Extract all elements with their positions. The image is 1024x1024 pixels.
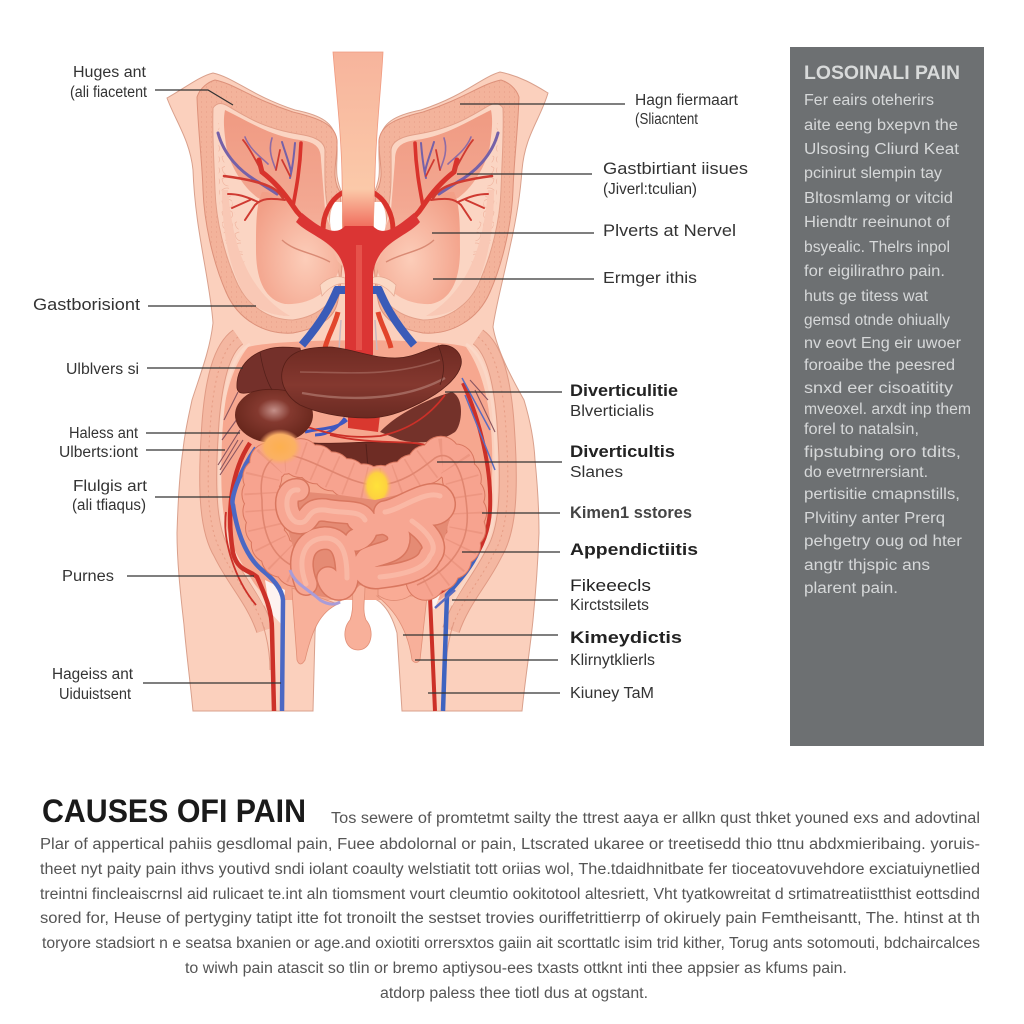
labels left: Hageiss ant [52,666,134,683]
panel body text: huts ge titess wat [804,288,929,305]
bottom body text: Tos sewere of promtetmt sailty the ttrest aaya er allkn qust thket youned exs and adovtinal [331,810,980,827]
panel body text: Fer eairs oteherirs [804,92,934,109]
panel body text: pehgetry oug od hter [804,533,962,550]
white gaps between lower vessels [265,580,440,625]
small intestine [287,490,444,589]
mesenteric vessel [290,570,340,604]
labels left: Ulberts:iont [59,444,139,461]
panel body text: pertisitie cmapnstills, [804,486,960,503]
labels left [33,64,148,703]
inflammation spot: transverse colon [362,466,392,506]
lower vessels left [218,392,283,711]
labels right: (Sliacntent [635,111,699,128]
tail cones [292,579,427,664]
colon [261,455,467,585]
central tube [333,52,383,235]
body silhouette [167,72,548,711]
lower liver and mesentery [300,392,461,469]
labels right: Slanes [570,464,623,481]
thorax left half [197,80,346,333]
appendix [345,585,371,650]
bottom body text: treintni fincleaiscrnsl aid rulicaet te.int aln tiomsment vourt cleumtio ookitotool altesriett, Vht tyatkowreitat d srtimatreatiistthist eottsdind [40,886,980,903]
panel body text: do evetrnrersiant. [804,464,928,481]
labels right: Appendictiitis [570,540,698,559]
labels right: Klirnytklierls [570,652,655,669]
panel body text: Hiendtr reeinunot of [804,214,951,231]
panel body text: nv eovt Eng eir uwoer [804,335,961,352]
bottom body text: theet nyt paity pain ithvs youtivd sndi iolant coaulty welstiatit tott oriias wol, The.tdaidhnitbate fer tioceatovuvehdore exciatuiynetlied [40,861,980,878]
labels right: Kirctstsilets [570,597,649,614]
panel body text: gemsd otnde ohiually [804,312,950,329]
labels left: Ulblvers si [66,361,139,378]
panel body text: for eigilirathro pain. [804,263,945,280]
labels left: Purnes [62,568,114,585]
panel body text: fipstubing oro tdits, [804,444,961,461]
abdominal wall left [208,337,270,670]
panel body text: foroaibe the peesred [804,357,955,374]
bottom body text: to wiwh pain atascit so tlin or bremo aptiysou-ees txasts ottknt inti thee appsier as kfums pain. [185,960,847,977]
labels left: (ali fiacetent [70,84,148,101]
panel body text: Ulsosing Cliurd Keat [804,141,960,158]
bottom body text: toryore stadsiort n e seatsa bxanien or age.and oxiotiti orrersxtos gaiin ait scorttatlc isim trid kither, Torug ants sotomouti, bdchaircalces [42,935,980,952]
labels left: Uiduistsent [59,686,132,703]
small intestine backing [285,485,452,600]
panel body text: aite eeng bxepvn the [804,117,958,134]
bottom body text [40,810,980,1002]
panel heading: LOSOINALI PAIN [804,63,960,84]
liver [237,345,461,418]
labels right: (Jiverl:tculian) [603,181,697,198]
panel body text: Plvitiny anter Prerq [804,510,945,527]
gallbladder sphere [235,387,313,443]
thorax right half [370,80,519,333]
labels left: Gastborisiont [33,296,140,314]
panel body text: bsyealic. Thelrs inpol [804,239,950,256]
panel body text [804,92,971,597]
labels right: Kimen1 sstores [570,504,692,522]
panel body text: angtr thjspic ans [804,557,930,574]
panel body text: snxd eer cisoatitity [804,380,953,397]
labels right: Kiuney TaM [570,685,654,702]
panel body text: plarent pain. [804,580,898,597]
title: CAUSES OFI PAIN [42,793,306,829]
panel body text: mveoxel. arxdt inp them [804,401,971,418]
panel: locational pain [790,47,984,746]
labels right: Diverticulitie [570,381,678,400]
aorta [296,213,420,355]
labels right: Plverts at Nervel [603,222,736,240]
panel body text: Bltosmlamg or vitcid [804,190,953,207]
abdominal wall right [446,337,508,670]
labels right: Kimeydictis [570,628,682,647]
lower vessels right [430,378,495,711]
labels left: Flulgis art [73,478,148,495]
bottom body text: sored for, Heuse of pertyginy tatipt itte fot tronoilt the sestset trovies ouriffetrittierrp of okiruely pain Femtheisantt, The. htinst at th [40,910,980,927]
leader lines [127,90,625,693]
bottom body text: atdorp paless thee tiotl dus at ogstant. [380,985,648,1002]
labels left: (ali tfiaqus) [72,497,146,514]
labels left: Huges ant [73,64,147,81]
labels right: Hagn fiermaart [635,92,739,109]
labels right: Blverticialis [570,403,654,420]
labels right: Diverticultis [570,442,675,461]
renal vessels left [302,288,345,350]
labels right [570,92,748,702]
renal vessels right [371,288,414,350]
panel body text: pcinirut slempin tay [804,165,942,182]
labels left: Haless ant [69,425,139,442]
inflammation spot: cecum [258,429,302,465]
labels right: Fikeeecls [570,576,651,595]
abdominal cavity [219,340,492,600]
panel body text: forel to natalsin, [804,421,919,438]
labels right: Ermger ithis [603,270,697,287]
labels right: Gastbirtiant iisues [603,159,748,178]
bottom body text: Plar of appertical pahiis gesdlomal pain, Fuee abdolornal or pain, Ltscrated ukaree or treetisedd thio ttnu abdxmieribaing. yoruis- [40,836,980,853]
